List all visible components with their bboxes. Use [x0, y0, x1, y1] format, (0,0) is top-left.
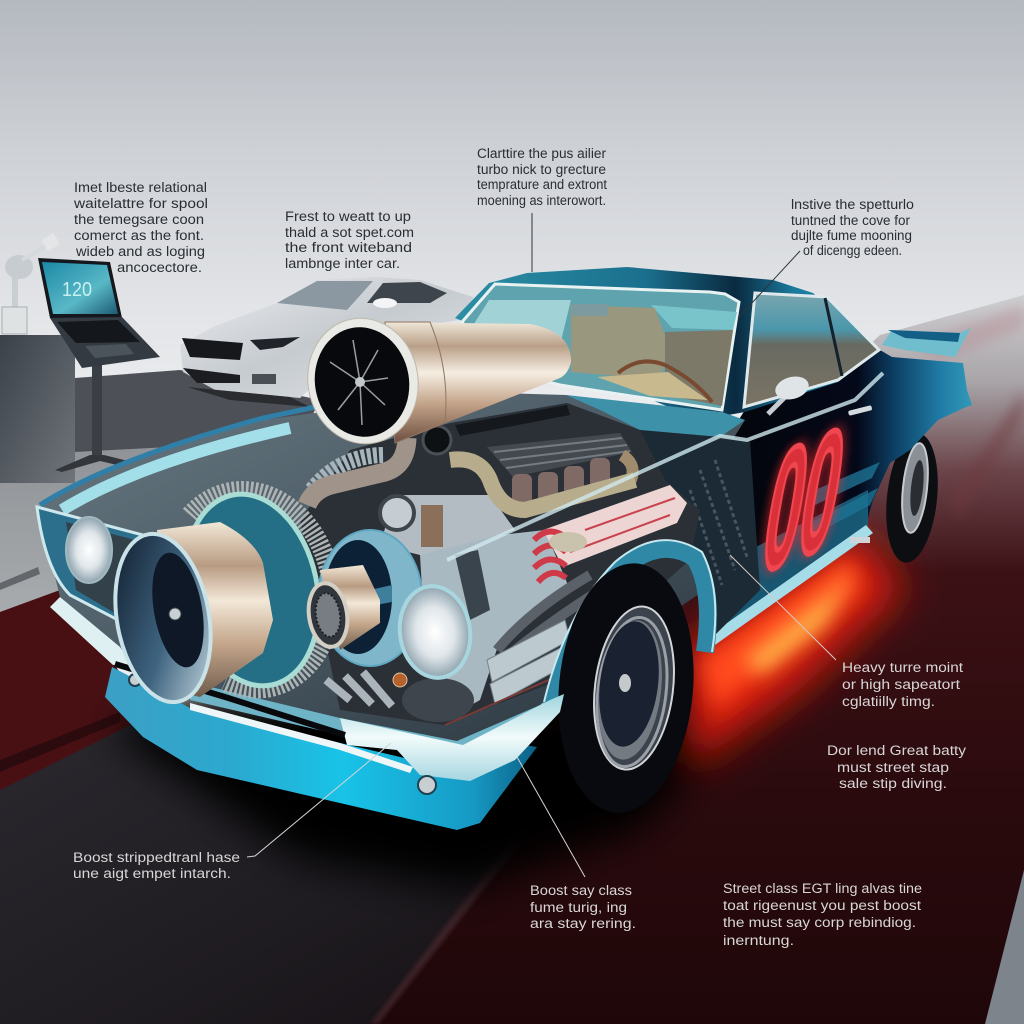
callout: boost stripped: Boost strippedtranl hase: [73, 850, 240, 865]
callout: roof: Clarttire the pus ailier: [477, 146, 606, 161]
callout: boost class: Boost say class: [530, 883, 632, 898]
fibrous wrap patch: [312, 455, 385, 490]
callout: safe strip driving: Dor lend Great batty: [827, 743, 966, 758]
robot arm lamp: [5, 233, 60, 307]
bronze fitting: [421, 505, 443, 547]
grille: [182, 338, 243, 360]
underglow red light: [680, 530, 905, 770]
callout: side window: lnstive the spetturlo: [791, 197, 914, 212]
taupe pipe: [307, 438, 407, 505]
callout: street class EGT: the must say corp rebindiog.: [723, 915, 916, 930]
teal housing: [168, 482, 336, 698]
callout: front windshield: [285, 209, 414, 271]
callout: safe strip driving: sale stip diving.: [839, 776, 947, 791]
callout: heavy turbo mount: or high sapeatort: [842, 677, 960, 692]
cylinder body: [385, 322, 571, 443]
laptop stand: [55, 365, 132, 472]
intake inner: [144, 549, 212, 671]
callout: front windshield: the front witeband: [285, 240, 412, 255]
left bumper section: [50, 597, 130, 665]
bumper dark gap: [115, 664, 345, 735]
red lower line: [445, 675, 560, 725]
bench: [597, 372, 708, 400]
callout: front windshield: lambnge inter car.: [285, 256, 400, 271]
cyan patch left: [470, 300, 571, 345]
top-mounted turbo: [298, 309, 571, 453]
jar: [2, 307, 27, 334]
infographic canvas: 00: [752, 389, 856, 611]
rear body and door: [700, 350, 972, 647]
background floor and road: [0, 295, 1024, 1024]
background silver sports car: [180, 277, 473, 407]
right gold bend: [622, 455, 633, 482]
callout: side window: tuntned the cove for: [791, 213, 910, 228]
rear-view mirror: [572, 304, 608, 316]
callout: boost class: fume turig, ing: [530, 900, 627, 915]
hood light stripe: [62, 428, 290, 510]
callout: side window: dujlte fume mooning: [791, 228, 912, 243]
callout: heavy turbo mount: cglatiilly timg.: [842, 694, 935, 709]
sill strip: [703, 525, 873, 652]
laptop screen: 120: [62, 279, 92, 301]
gear ring: [190, 490, 332, 689]
callout: roof: temprature and extront: [477, 177, 607, 192]
gold intake pipe: [450, 459, 635, 510]
right headlight: [394, 582, 476, 682]
silver block: [380, 495, 515, 560]
callout: boost stripped: une aigt empet intarch.: [73, 866, 231, 881]
callout: top-left: [73, 180, 208, 275]
top ring: [423, 426, 451, 454]
callout: top-left: comerct as the font.: [74, 228, 204, 243]
callout: street class EGT: Street class EGT ling alvas tine: [723, 881, 922, 896]
callout: top-left: the temegsare coon: [74, 212, 204, 227]
silver cover blocks: [487, 620, 572, 704]
callout: side window: [791, 197, 914, 258]
top dark bar: [455, 405, 570, 436]
left headlight: [37, 507, 143, 620]
copper bolt: [393, 673, 407, 687]
mirror: [373, 298, 397, 308]
callout: boost stripped: [73, 850, 240, 881]
fender arch: [544, 540, 715, 705]
lower chrome strip: [190, 703, 413, 773]
wheel shadow: [187, 387, 310, 407]
hood upper trim: [40, 406, 320, 505]
manifold runners: [512, 458, 610, 504]
machine casing: [420, 530, 570, 720]
callout: top-left: wideb and as loging: [75, 244, 205, 259]
callout: front windshield: thald a sot spet.com: [285, 225, 414, 240]
lower fins: [326, 672, 392, 706]
secondary blue ring: [318, 530, 422, 666]
alternator pulley: [380, 496, 414, 530]
callout: boost class: ara stay rering.: [530, 916, 636, 931]
laptop keyboard: [50, 317, 160, 368]
infographic canvas: 00: [752, 389, 856, 611]
red intercooler: [534, 485, 687, 582]
steering wheel: [618, 361, 712, 402]
turbo hub: [355, 377, 365, 387]
hood glass: [38, 392, 745, 743]
collar: [385, 322, 446, 443]
lower intake: [183, 368, 240, 383]
callout: safe strip driving: [827, 743, 966, 791]
rear seat: [571, 305, 669, 380]
callout: boost class: [530, 883, 636, 931]
door mirror: [768, 373, 811, 414]
compressor body: [157, 522, 273, 697]
intake ring: [103, 526, 223, 710]
car shadow: [110, 690, 760, 890]
callout: side window: of dicengg edeen.: [803, 243, 902, 258]
callout: front windshield: Frest to weatt to up: [285, 209, 411, 224]
laptop screen: [38, 258, 122, 318]
chrome rear detail: [850, 537, 870, 543]
side window: [744, 293, 879, 407]
callout: safe strip driving: must street stap: [837, 760, 949, 775]
callout: top-left: ancocectore.: [117, 260, 202, 275]
turbo face: [306, 320, 418, 444]
callout: top-left: waitelattre for spool: [73, 196, 208, 211]
turbo face rim: [298, 309, 428, 453]
cowl strip: [566, 395, 745, 437]
large front turbo: [103, 482, 336, 710]
headlight: [250, 337, 300, 350]
cyan patch right: [651, 305, 737, 330]
engine: [300, 403, 700, 725]
laptop workstation: [0, 233, 160, 483]
lower door teal panel: [710, 490, 868, 640]
fog lamp: [252, 374, 276, 384]
lower engine dark: [402, 678, 474, 722]
callout: heavy turbo mount: Heavy turre moint: [842, 660, 963, 675]
hoses: [497, 575, 597, 660]
callout: street class EGT: inerntung.: [723, 933, 794, 948]
callout: roof: [477, 146, 607, 208]
engine block dark: [300, 403, 700, 725]
windshield: [462, 284, 739, 410]
door seam: [748, 442, 750, 590]
turbine hub: [169, 608, 181, 620]
rear spoiler: [882, 328, 971, 357]
seat right: [665, 330, 733, 406]
machinery behind fender: [640, 430, 760, 645]
bay lower trim: [190, 680, 575, 758]
side window: [367, 282, 447, 303]
door number 00: [752, 389, 856, 611]
chrome bumper: [50, 597, 564, 794]
front splitter: [105, 667, 537, 830]
windshield: [277, 281, 373, 310]
door streaks: [808, 462, 880, 538]
roof: [455, 267, 880, 420]
callout: roof: turbo nick to grecture: [477, 162, 606, 177]
annotation leader lines: [247, 213, 836, 877]
turbo blades: [330, 340, 388, 425]
shoulder glass strip: [447, 373, 883, 560]
door handle: [848, 405, 872, 416]
callout: roof: moening as interowort.: [477, 193, 606, 208]
callout: top-left: Imet lbeste relational: [74, 180, 207, 195]
bumper bolts: [129, 674, 141, 686]
callout: street class EGT: toat rigeenust you pest boost: [723, 898, 921, 913]
small gold turbo: [305, 565, 380, 650]
callout: heavy turbo mount: [842, 660, 963, 709]
front wheel: [548, 558, 704, 818]
callout: street class EGT: [723, 881, 922, 948]
rear wheel: [880, 431, 944, 565]
valve cover: [487, 433, 632, 477]
side table: [0, 335, 75, 483]
casing slot: [455, 550, 490, 620]
